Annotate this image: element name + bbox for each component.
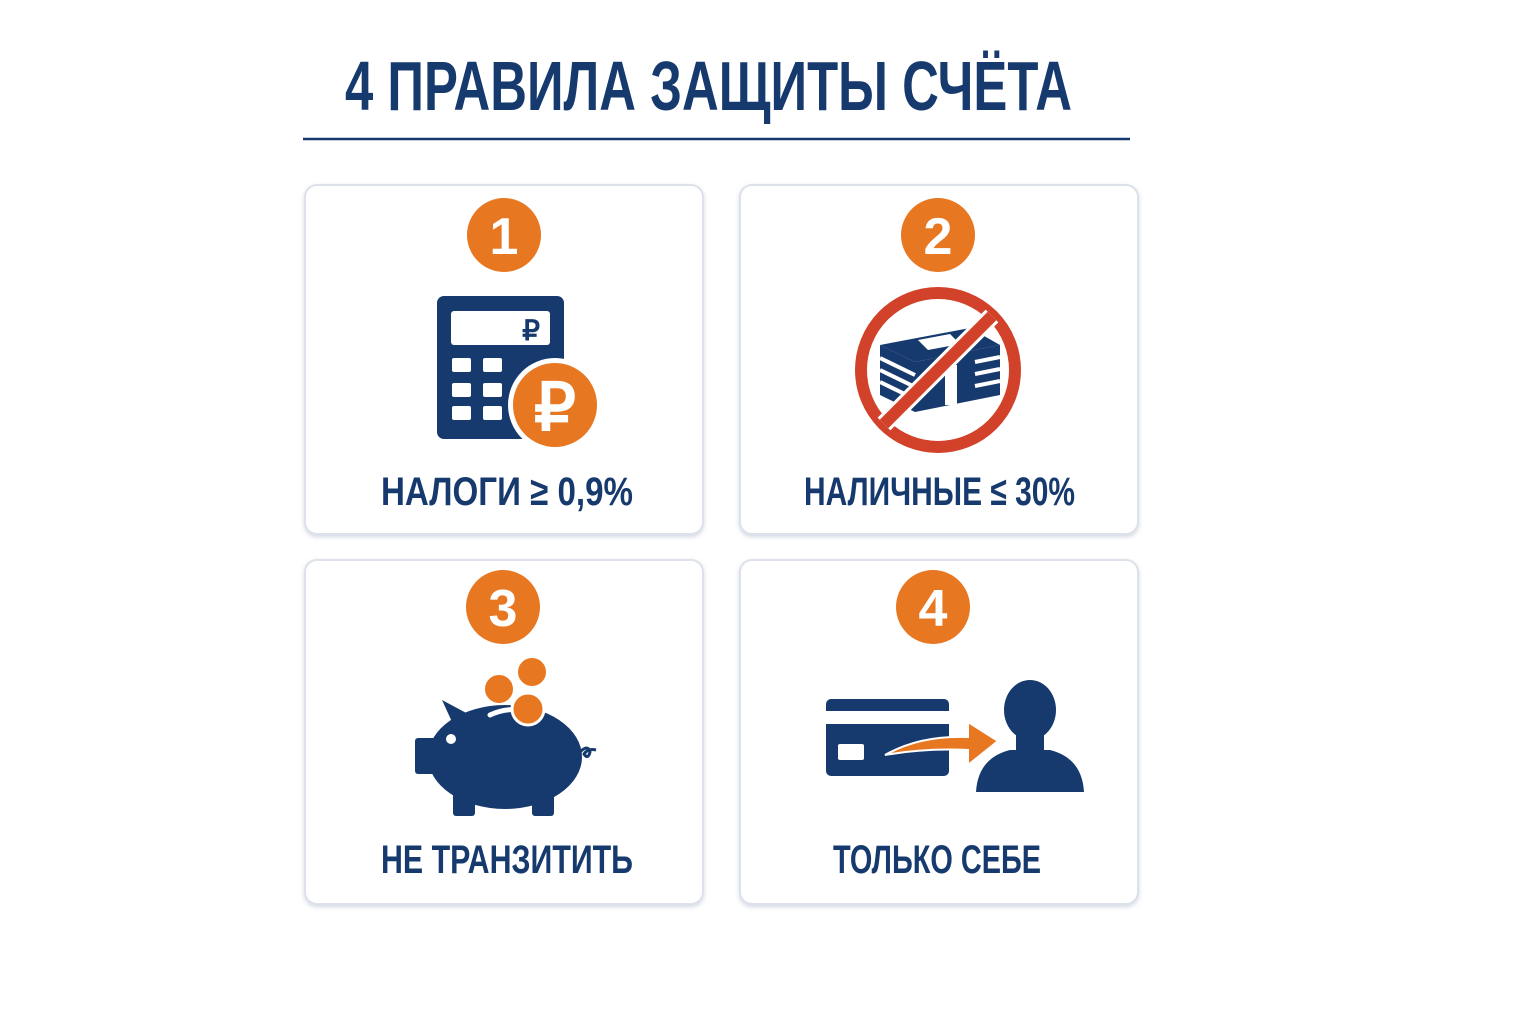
- icon: calculator with ruble coin: ₽: [534, 370, 576, 444]
- label 2: НАЛИЧНЫЕ ≤ 30%: [804, 470, 1075, 514]
- panel: rule 3 no transit: [305, 560, 703, 904]
- badge 4: 4: [919, 580, 948, 638]
- icon: calculator with ruble coin: [437, 296, 602, 452]
- icon: card to person: [826, 680, 1084, 792]
- badge 2: 2: [924, 208, 952, 266]
- badge 4: [896, 570, 970, 644]
- badge 1: [467, 198, 541, 272]
- icon: calculator with ruble coin: ₽: [522, 315, 540, 346]
- panel: rule 1 taxes: [305, 185, 703, 534]
- label 4: ТОЛЬКО СЕБЕ: [833, 838, 1041, 882]
- label 3: НЕ ТРАНЗИТИТЬ: [381, 838, 633, 882]
- icon: no cash: [861, 293, 1015, 447]
- icon: piggy bank: [415, 657, 596, 816]
- badge 3: [466, 570, 540, 644]
- badge 2: [901, 198, 975, 272]
- panel: rule 4 only to self: [740, 560, 1138, 904]
- badge 3: 3: [489, 580, 517, 638]
- badge 1: 1: [490, 208, 518, 266]
- panel: rule 2 cash: [740, 185, 1138, 534]
- label 1: НАЛОГИ ≥ 0,9%: [381, 470, 633, 514]
- title: 4 ПРАВИЛА ЗАЩИТЫ СЧЁТА: [345, 47, 1072, 125]
